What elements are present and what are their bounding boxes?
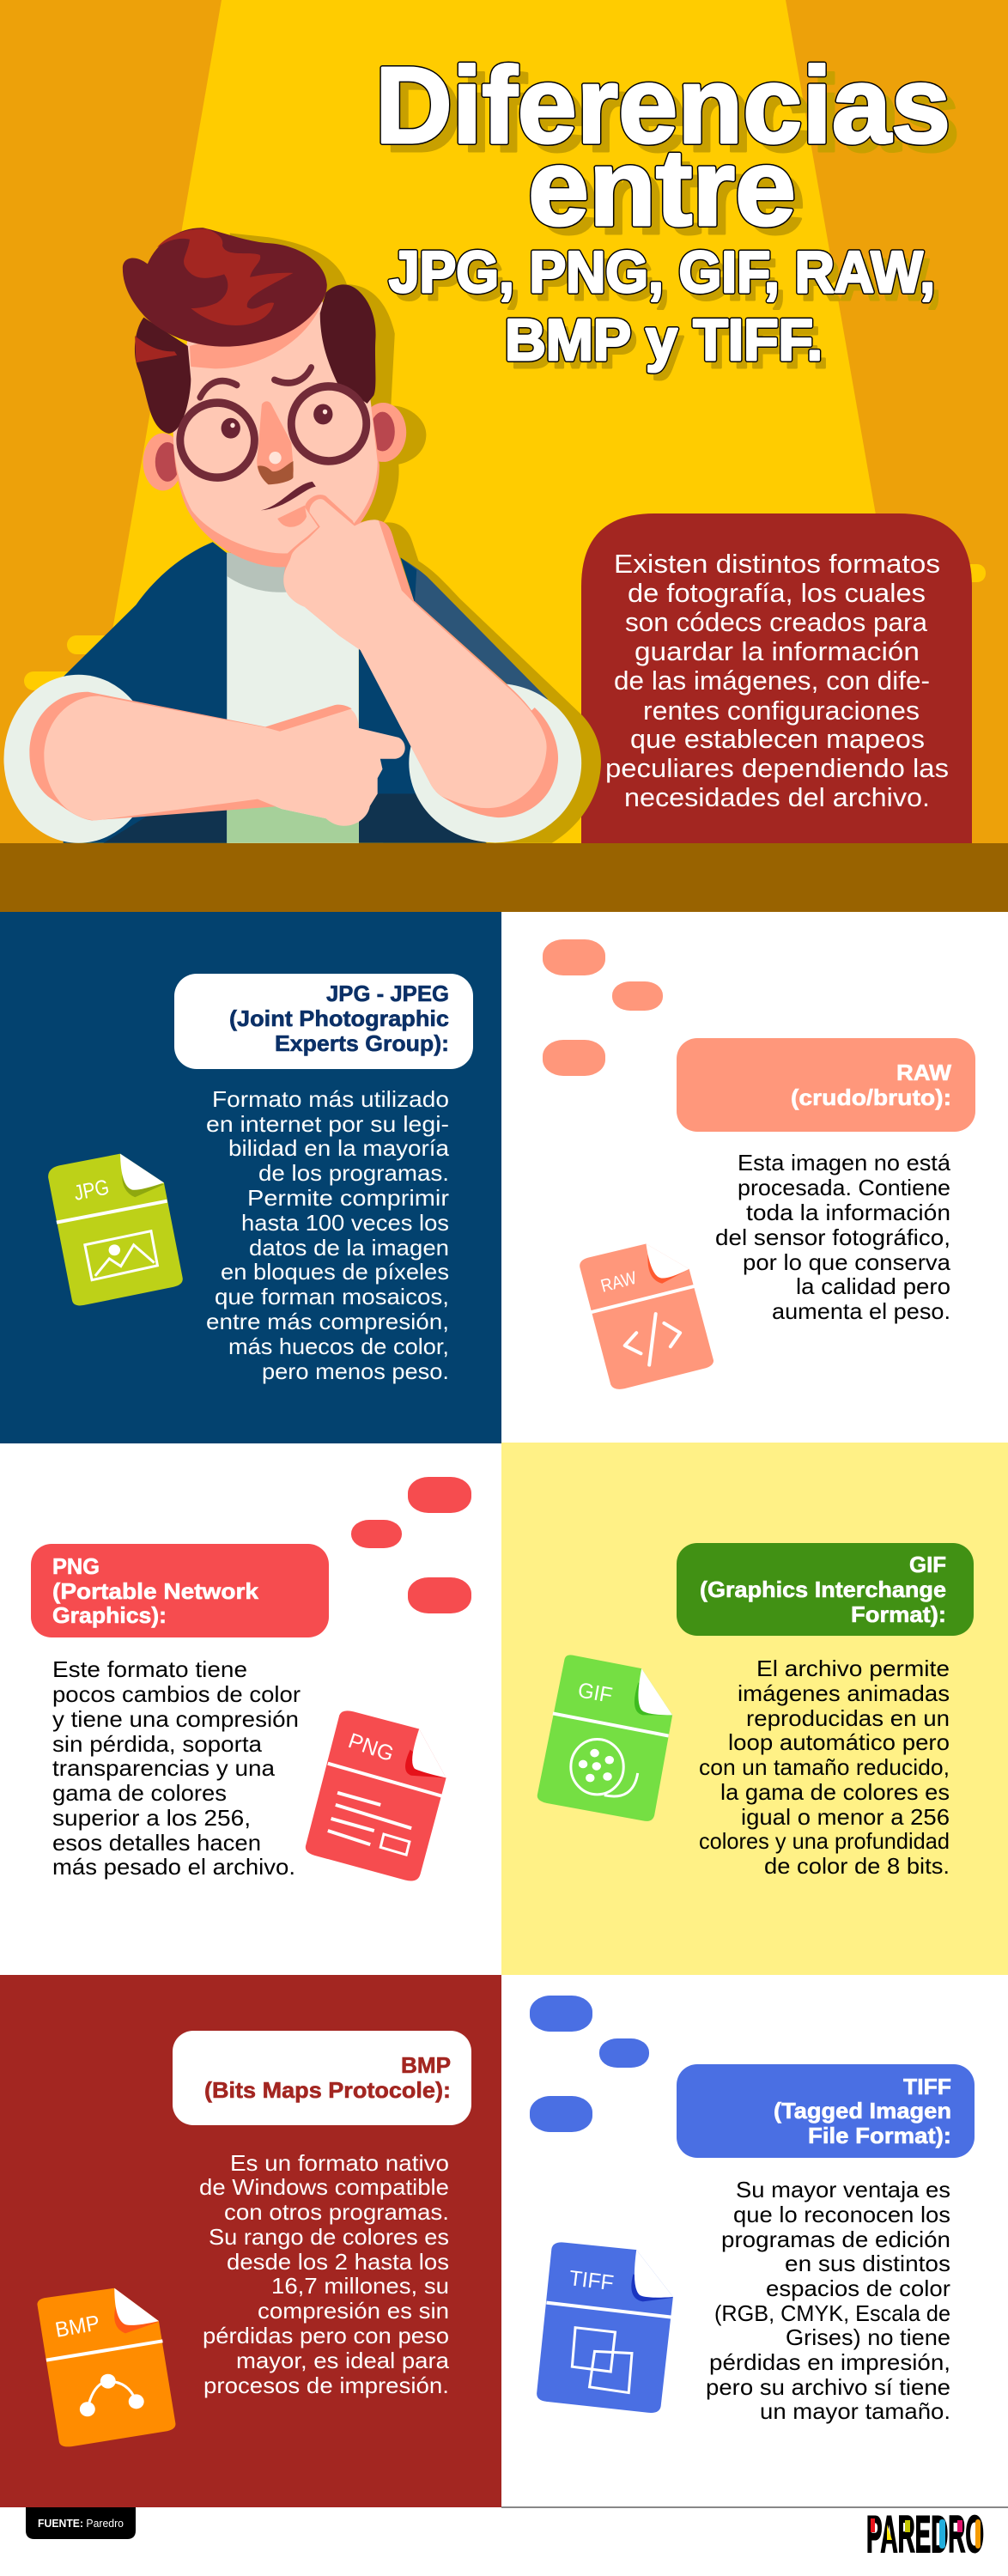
RAW body text	[715, 1150, 951, 1324]
TIFF decorative pills	[530, 1996, 649, 2132]
title outline: entre	[528, 127, 796, 248]
JPG body text: más huecos de color,	[228, 1334, 449, 1359]
panel: BMP	[0, 1975, 501, 2507]
shirt	[227, 552, 359, 843]
GIF body text: imágenes animadas	[738, 1680, 950, 1706]
JPG heading: Experts Group):	[275, 1030, 449, 1056]
PNG body text: transparencias y una	[52, 1755, 276, 1781]
BMP body text: 16,7 millones, su	[271, 2273, 449, 2299]
GIF body text: de color de 8 bits.	[764, 1853, 950, 1879]
title outline	[375, 45, 950, 373]
mouth	[261, 482, 316, 527]
title fill	[375, 45, 950, 373]
GIF body text: colores y una profundidad	[699, 1828, 950, 1854]
panel: GIF	[501, 1443, 1008, 1975]
callout box	[581, 513, 972, 843]
PNG body text: pocos cambios de color	[52, 1681, 301, 1707]
RAW body text: aumenta el peso.	[772, 1298, 950, 1324]
title fill: Diferencias	[375, 45, 950, 166]
PNG heading: Graphics):	[52, 1602, 167, 1628]
RAW background	[501, 912, 1008, 1443]
PNG heading	[31, 1544, 329, 1637]
TIFF body text: (RGB, CMYK, Escala de	[714, 2300, 950, 2326]
icon: GIF file	[537, 1655, 672, 1821]
JPG body text: en internet por su legi-	[206, 1111, 449, 1137]
icon: TIFF file: TIFF	[568, 2266, 615, 2295]
icon: RAW file: RAW	[598, 1268, 639, 1297]
title fill: entre	[528, 127, 796, 248]
jacket	[64, 542, 548, 843]
title outline: Diferencias	[375, 45, 950, 166]
callout text: que establecen mapeos	[630, 724, 925, 754]
character shadow	[230, 234, 601, 843]
GIF body text: El archivo permite	[756, 1656, 950, 1681]
TIFF body text: que lo reconocen los	[733, 2202, 950, 2227]
title shadow: Diferencias	[385, 53, 960, 174]
callout text: necesidades del archivo.	[624, 782, 930, 812]
panel: TIFF	[501, 1975, 1008, 2507]
eyebrows	[200, 368, 311, 398]
BMP body text: pérdidas pero con peso	[203, 2323, 449, 2348]
PNG body text: superior a los 256,	[52, 1805, 251, 1831]
TIFF heading: (Tagged Imagen	[774, 2098, 951, 2123]
icon: JPG file	[48, 1154, 183, 1305]
BMP body text: Es un formato nativo	[230, 2150, 449, 2176]
GIF body text	[699, 1656, 950, 1879]
TIFF body text: Su mayor ventaja es	[736, 2177, 950, 2202]
BMP body text: con otros programas.	[224, 2199, 449, 2225]
RAW decorative pills	[543, 939, 663, 1076]
RAW heading: (crudo/bruto):	[791, 1084, 951, 1110]
icon: JPG file: JPG	[72, 1176, 111, 1206]
BMP background	[0, 1975, 501, 2507]
RAW heading	[677, 1038, 975, 1132]
JPG body text: pero menos peso.	[262, 1358, 449, 1384]
GIF body text: igual o menor a 256	[741, 1804, 950, 1830]
ears	[143, 403, 406, 490]
PNG body text: esos detalles hacen	[52, 1830, 261, 1856]
JPG heading: (Joint Photographic	[229, 1005, 449, 1031]
JPG body text: datos de la imagen	[249, 1235, 449, 1261]
icon: BMP file: BMP	[53, 2311, 101, 2342]
JPG body text: que forman mosaicos,	[215, 1284, 449, 1309]
TIFF body text: espacios de color	[766, 2275, 950, 2301]
TIFF heading: File Format):	[808, 2123, 951, 2148]
icon: BMP file	[37, 2288, 175, 2446]
glasses	[180, 386, 367, 477]
callout text: Existen distintos formatos	[614, 549, 940, 579]
TIFF body text: en sus distintos	[785, 2251, 950, 2276]
panel: hero	[0, 0, 1008, 912]
PNG body text: sin pérdida, soporta	[52, 1731, 263, 1757]
BMP body text: compresión es sin	[258, 2298, 449, 2324]
callout text	[605, 549, 949, 812]
title shadow	[385, 53, 960, 380]
GIF body text: con un tamaño reducido,	[699, 1754, 950, 1780]
PNG background	[0, 1443, 501, 1975]
callout text: peculiares dependiendo las	[605, 753, 949, 783]
JPG heading	[174, 974, 473, 1069]
BMP body text: desde los 2 hasta los	[227, 2249, 449, 2275]
GIF heading: (Graphics Interchange	[700, 1577, 946, 1602]
JPG body text: Formato más utilizado	[212, 1086, 449, 1112]
right arm and hand on chin	[283, 495, 558, 817]
hero background	[0, 0, 1008, 912]
GIF body text: reproducidas en un	[746, 1705, 950, 1731]
callout text: de las imágenes, con dife-	[614, 665, 930, 696]
BMP heading: (Bits Maps Protocole):	[204, 2077, 451, 2103]
RAW body text: toda la información	[746, 1200, 950, 1225]
title outline: JPG, PNG, GIF, RAW,	[389, 240, 935, 305]
motion pills	[24, 564, 986, 690]
RAW body text: la calidad pero	[796, 1273, 950, 1299]
icon: RAW file	[580, 1244, 713, 1389]
TIFF body text: pero su archivo sí tiene	[706, 2374, 950, 2400]
title shadow: BMP y TIFF.	[511, 315, 829, 380]
GIF heading: Format):	[851, 1601, 946, 1627]
GIF body text: loop automático pero	[728, 1729, 950, 1755]
icon: PNG file	[306, 1710, 446, 1881]
JPG body text: bilidad en la mayoría	[228, 1135, 450, 1161]
PNG heading: (Portable Network	[52, 1578, 259, 1604]
callout text: guardar la información	[635, 636, 920, 666]
left arm and pointing hand	[29, 692, 405, 826]
PNG body text	[52, 1656, 301, 1880]
JPG body text: entre más compresión,	[206, 1309, 449, 1334]
icon: TIFF file	[537, 2242, 673, 2413]
JPG body text: de los programas.	[258, 1160, 449, 1186]
panel: PNG	[0, 1443, 501, 1975]
RAW body text: por lo que conserva	[743, 1249, 951, 1275]
footer rule	[501, 2506, 1008, 2508]
TIFF body text: pérdidas en impresión,	[709, 2349, 950, 2375]
footer	[26, 2506, 1008, 2563]
title fill: JPG, PNG, GIF, RAW,	[389, 240, 935, 305]
TIFF body text: un mayor tamaño.	[760, 2398, 950, 2424]
BMP body text	[199, 2150, 450, 2398]
TIFF body text: programas de edición	[721, 2227, 950, 2252]
title fill: BMP y TIFF.	[505, 307, 823, 373]
PNG body text: y tiene una compresión	[52, 1706, 299, 1732]
BMP heading	[173, 2031, 471, 2125]
callout text: de fotografía, los cuales	[628, 578, 926, 608]
TIFF heading: TIFF	[903, 2074, 951, 2099]
title shadow: JPG, PNG, GIF, RAW,	[395, 247, 941, 313]
JPG body text	[206, 1086, 450, 1384]
icon: PNG file: PNG	[345, 1728, 397, 1766]
title	[375, 45, 960, 380]
TIFF heading	[677, 2064, 975, 2158]
title outline: BMP y TIFF.	[505, 307, 823, 373]
PNG body text: más pesado el archivo.	[52, 1854, 295, 1880]
RAW body text: procesada. Contiene	[738, 1175, 950, 1200]
BMP body text: procesos de impresión.	[203, 2372, 449, 2398]
PNG heading: PNG	[52, 1553, 100, 1579]
BMP body text: mayor, es ideal para	[236, 2348, 450, 2373]
ground	[0, 843, 1008, 912]
source tag: FUENTE: Paredro	[38, 2517, 124, 2530]
hair	[123, 228, 376, 434]
PNG body text: Este formato tiene	[52, 1656, 247, 1682]
PNG decorative pills	[351, 1477, 471, 1613]
sleeves	[3, 675, 581, 843]
icon: GIF file: GIF	[576, 1678, 614, 1708]
BMP body text: de Windows compatible	[199, 2174, 449, 2200]
source tag	[26, 2507, 136, 2539]
callout text: son códecs creados para	[625, 607, 928, 637]
panel: JPG	[0, 912, 501, 1443]
eyes	[222, 404, 332, 439]
nose and moustache	[257, 401, 294, 484]
BMP heading: BMP	[401, 2052, 451, 2078]
RAW body text: Esta imagen no está	[738, 1150, 951, 1176]
GIF heading	[677, 1543, 974, 1636]
JPG background	[0, 912, 501, 1443]
TIFF body text	[706, 2177, 950, 2424]
TIFF background	[501, 1975, 1008, 2507]
head	[173, 301, 380, 567]
GIF body text: la gama de colores es	[720, 1779, 950, 1805]
GIF heading: GIF	[909, 1552, 946, 1577]
TIFF body text: Grises) no tiene	[786, 2324, 950, 2350]
intro callout	[581, 513, 972, 843]
JPG body text: Permite comprimir	[247, 1185, 449, 1211]
title shadow: entre	[537, 136, 805, 257]
JPG body text: en bloques de píxeles	[221, 1259, 449, 1285]
JPG heading: JPG - JPEG	[326, 981, 449, 1006]
character: thinking man	[3, 228, 601, 843]
RAW body text: del sensor fotográfico,	[715, 1224, 950, 1250]
GIF background	[501, 1443, 1008, 1975]
panel: RAW	[501, 912, 1008, 1443]
BMP body text: Su rango de colores es	[209, 2224, 449, 2250]
spotlight	[76, 0, 933, 843]
PNG body text: gama de colores	[52, 1780, 227, 1806]
JPG body text: hasta 100 veces los	[241, 1210, 449, 1236]
RAW heading: RAW	[896, 1060, 951, 1085]
callout text: rentes configuraciones	[643, 696, 920, 726]
